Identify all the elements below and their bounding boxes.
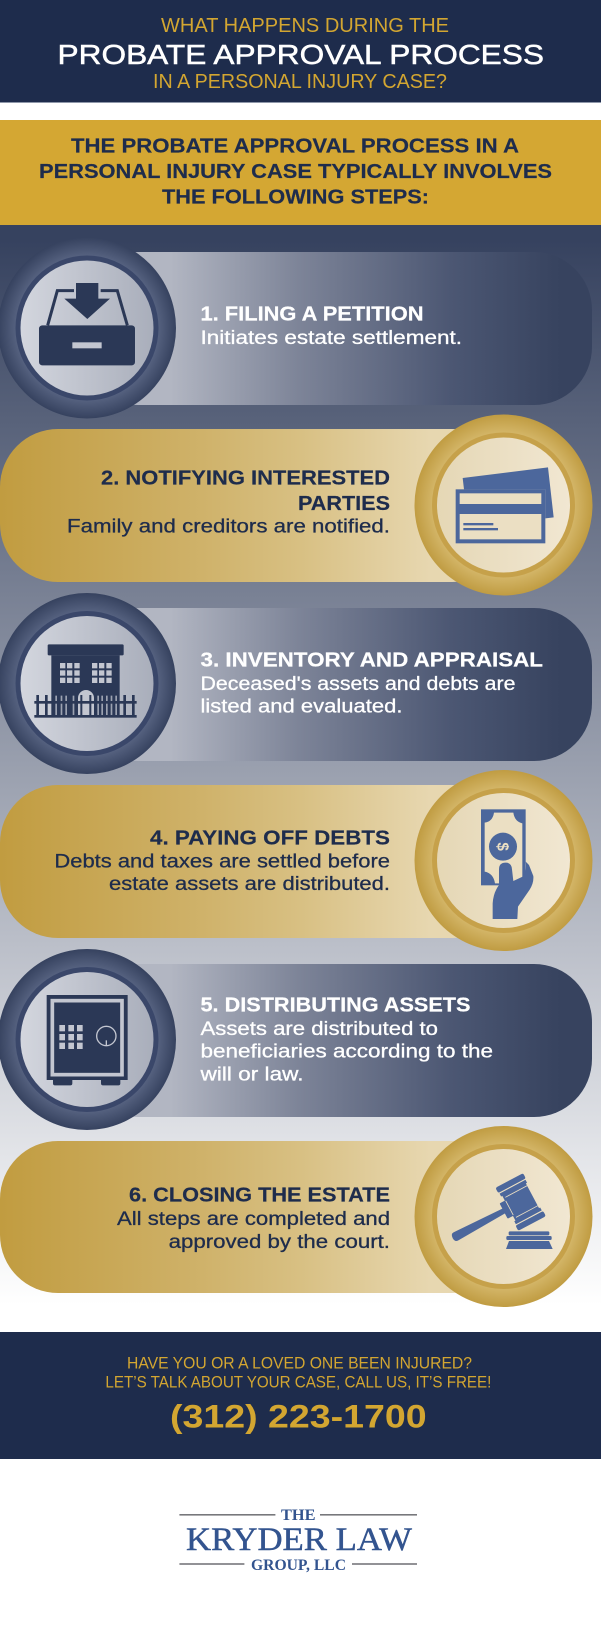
header banner: WHAT HAPPENS DURING THE bbox=[161, 15, 449, 37]
step 1 text: Initiates estate settlement. bbox=[200, 327, 462, 349]
call to action footer: HAVE YOU OR A LOVED ONE BEEN INJURED? bbox=[127, 1354, 472, 1372]
call to action footer bbox=[0, 1332, 601, 1459]
header banner bbox=[0, 0, 601, 103]
panel: step 3 inventory and appraisal bbox=[0, 593, 592, 774]
intro banner: THE PROBATE APPROVAL PROCESS IN A bbox=[71, 135, 519, 158]
panel: step 1 filing a petition bbox=[0, 238, 592, 418]
panel: step 4 paying off debts bbox=[0, 770, 592, 951]
icon: safe bbox=[47, 995, 128, 1085]
step 5 text bbox=[199, 993, 493, 1086]
step 3 text: Deceased's assets and debts are bbox=[200, 673, 516, 695]
step 5 text: will or law. bbox=[199, 1064, 304, 1086]
step 1 text: 1. FILING A PETITION bbox=[200, 303, 424, 326]
step 6 text bbox=[117, 1184, 390, 1253]
call to action footer: LET’S TALK ABOUT YOUR CASE, CALL US, IT’S FREE! bbox=[105, 1373, 491, 1391]
header banner: PROBATE APPROVAL PROCESS bbox=[58, 39, 544, 70]
icon: gavel bbox=[441, 1173, 553, 1260]
step 2 text bbox=[67, 467, 390, 538]
panel: step 5 distributing assets bbox=[0, 949, 592, 1130]
step 2 text: PARTIES bbox=[298, 492, 390, 515]
intro banner bbox=[0, 120, 601, 225]
steps background bbox=[0, 225, 601, 1332]
step 4 text bbox=[54, 827, 390, 895]
icon: inbox tray bbox=[39, 283, 135, 365]
call to action footer: (312) 223-1700 bbox=[170, 1398, 427, 1434]
step 6 text: All steps are completed and bbox=[117, 1208, 390, 1230]
step 5 text: beneficiaries according to the bbox=[200, 1041, 493, 1063]
step 2 text: Family and creditors are notified. bbox=[67, 516, 390, 538]
step 3 text bbox=[200, 649, 543, 718]
header banner: IN A PERSONAL INJURY CASE? bbox=[153, 71, 447, 93]
logo: KRYDER LAW bbox=[186, 1522, 413, 1558]
step 1 text bbox=[200, 303, 462, 349]
icon: building bbox=[34, 644, 137, 718]
step 4 text: Debts and taxes are settled before bbox=[54, 851, 390, 873]
step 3 text: listed and evaluated. bbox=[200, 696, 402, 718]
icon: cards bbox=[456, 467, 554, 543]
step 5 text: Assets are distributed to bbox=[200, 1018, 438, 1040]
step 5 text: 5. DISTRIBUTING ASSETS bbox=[200, 993, 470, 1016]
step 6 text: 6. CLOSING THE ESTATE bbox=[129, 1184, 390, 1207]
logo: THE bbox=[281, 1507, 316, 1524]
step 2 text: 2. NOTIFYING INTERESTED bbox=[101, 467, 390, 490]
step 4 text: 4. PAYING OFF DEBTS bbox=[150, 827, 390, 850]
panel: step 6 closing the estate bbox=[0, 1126, 592, 1307]
logo: GROUP, LLC bbox=[251, 1557, 346, 1574]
intro banner: PERSONAL INJURY CASE TYPICALLY INVOLVES bbox=[39, 160, 552, 183]
step 3 text: 3. INVENTORY AND APPRAISAL bbox=[200, 649, 543, 672]
step 4 text: estate assets are distributed. bbox=[109, 873, 390, 895]
icon: hand with money: $ bbox=[494, 842, 511, 851]
panel: step 2 notifying interested parties bbox=[0, 414, 592, 596]
step 6 text: approved by the court. bbox=[169, 1231, 390, 1253]
icon: hand with money bbox=[481, 809, 533, 919]
logo bbox=[179, 1507, 417, 1574]
intro banner: THE FOLLOWING STEPS: bbox=[162, 186, 429, 209]
